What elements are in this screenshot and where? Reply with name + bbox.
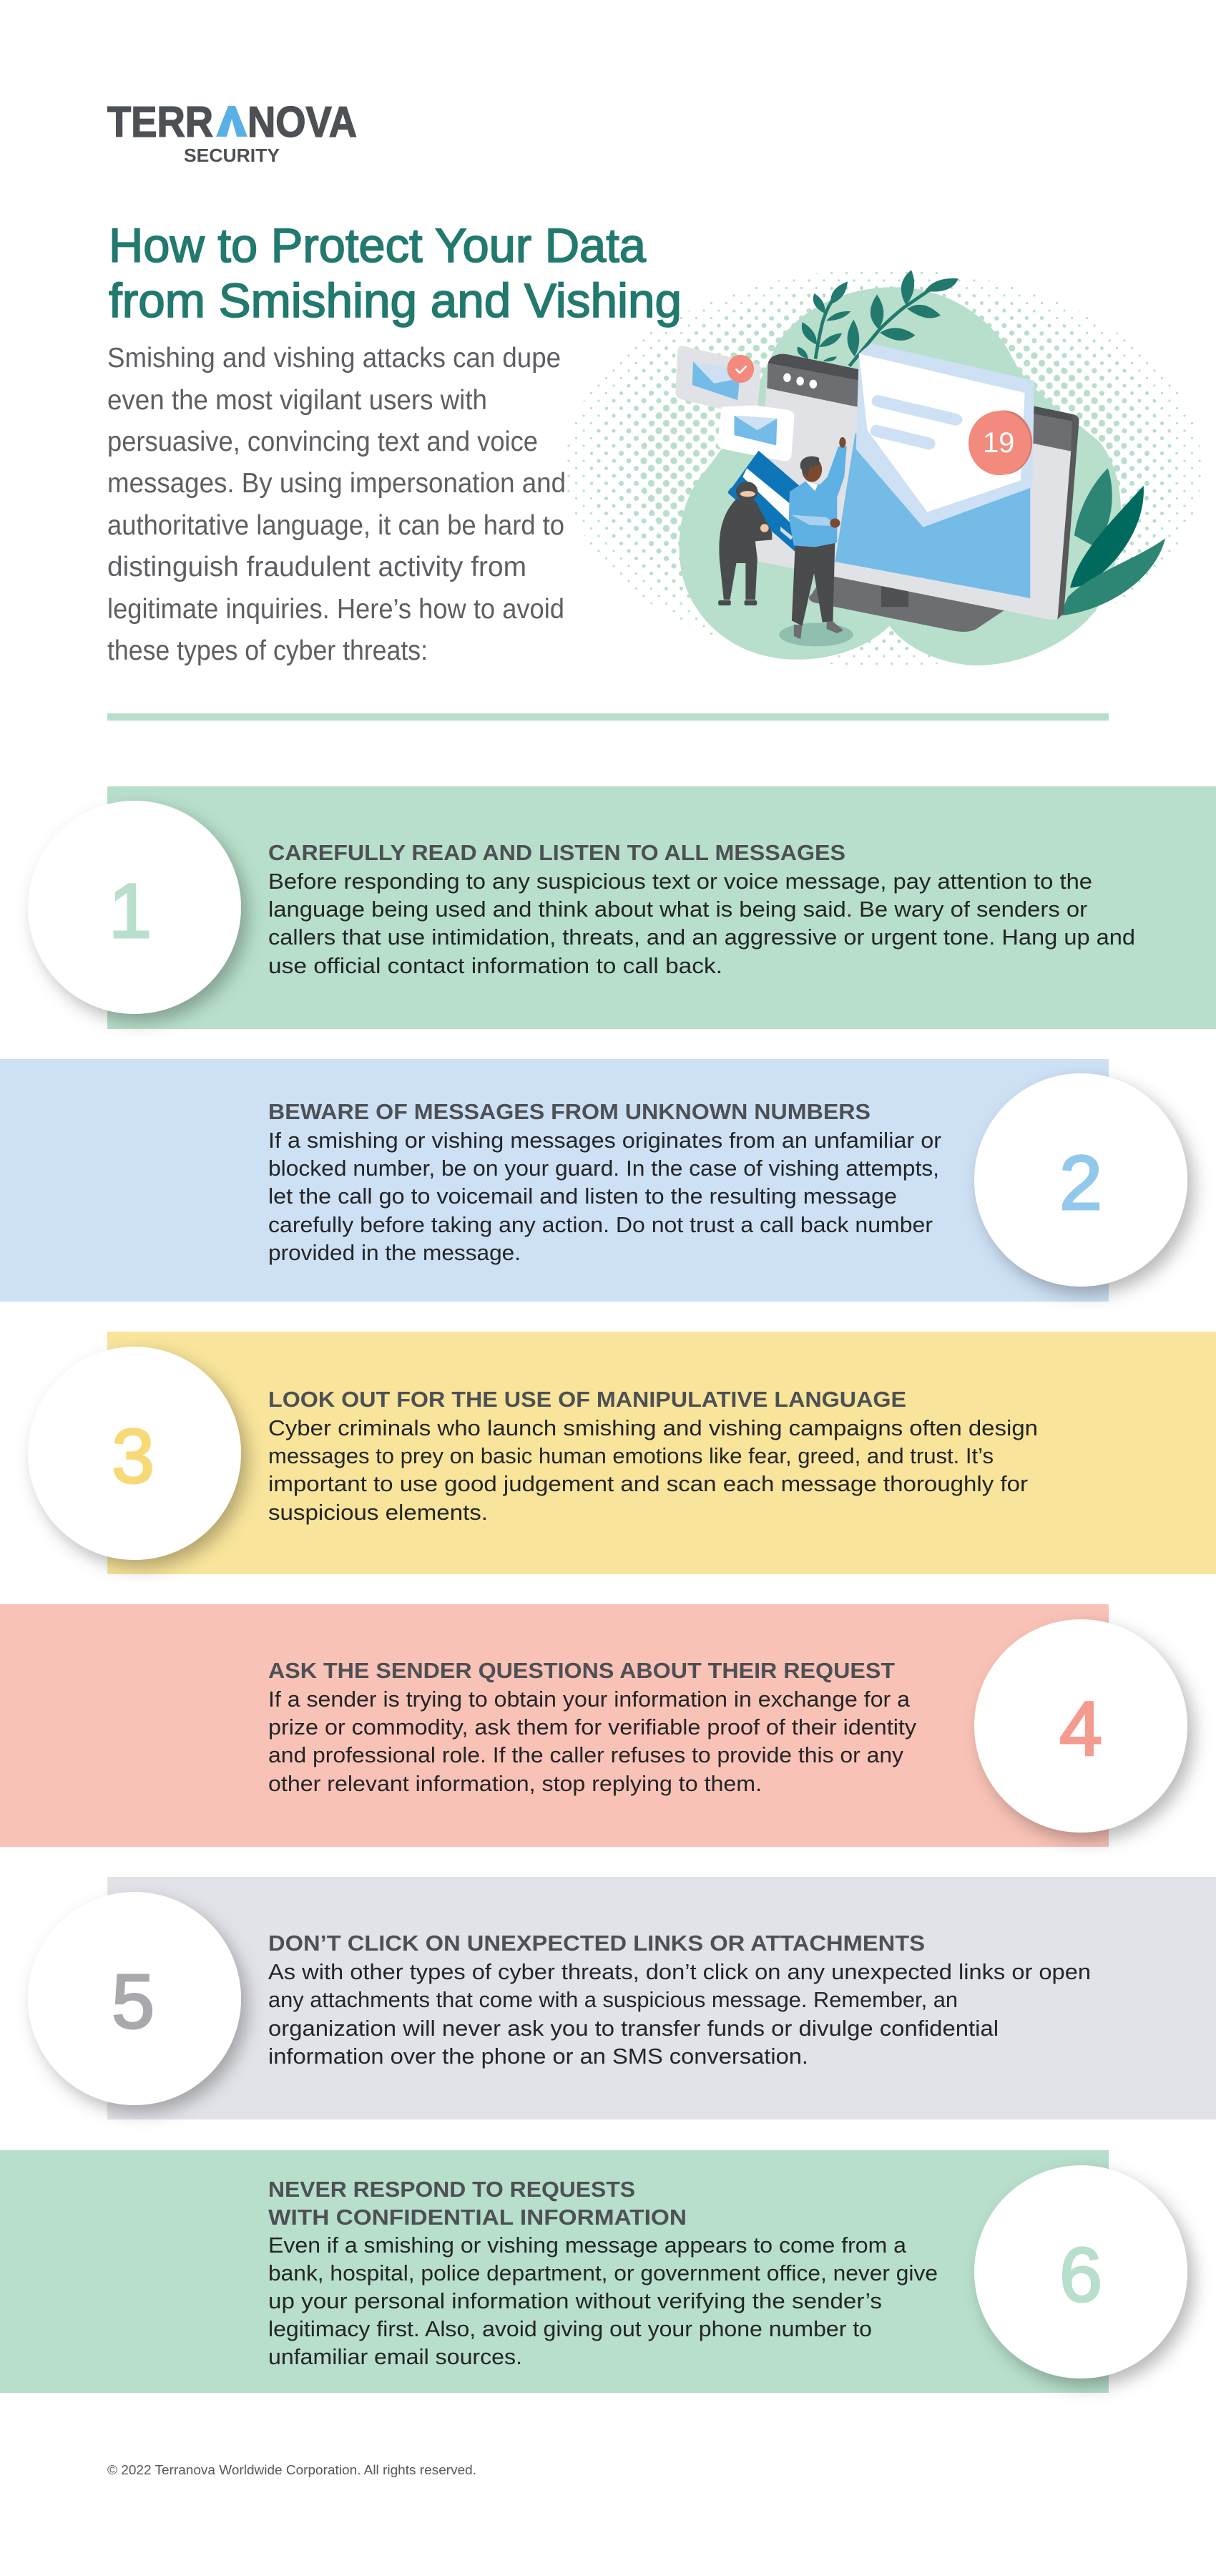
step 1 text (268, 840, 1135, 978)
step 2 text: carefully before taking any action. Do not trust a call back number (268, 1212, 933, 1237)
number circle 4 (974, 1619, 1187, 1833)
step 2 text: BEWARE OF MESSAGES FROM UNKNOWN NUMBERS (268, 1099, 871, 1124)
title (109, 219, 682, 328)
logo: Terranova Security (107, 98, 357, 166)
step 5 text: any attachments that come with a suspicious message. Remember, an (268, 1987, 958, 2012)
number circle 3 (28, 1347, 241, 1560)
step 1 text: language being used and think about what is being said. Be wary of senders or (268, 897, 1087, 922)
step 3 text: messages to prey on basic human emotions like fear, greed, and trust. It’s (268, 1443, 994, 1468)
step 4 text: prize or commodity, ask them for verifiable proof of their identity (268, 1714, 917, 1740)
step 6 text: Even if a smishing or vishing message appears to come from a (268, 2233, 907, 2258)
step 6 text: NEVER RESPOND TO REQUESTS (268, 2177, 635, 2202)
logo: Terranova Security: SECURITY (184, 145, 280, 166)
title: from Smishing and Vishing (109, 274, 682, 328)
plants: top branches (797, 270, 958, 366)
step 3 text: LOOK OUT FOR THE USE OF MANIPULATIVE LANGUAGE (268, 1387, 906, 1412)
panel: step 3 (28, 1332, 1216, 1574)
step 6 text: WITH CONFIDENTIAL INFORMATION (268, 2205, 687, 2230)
green blob (680, 287, 1121, 665)
step 3 text (268, 1387, 1038, 1525)
number circle 2 (974, 1073, 1187, 1287)
step 2 text: let the call go to voicemail and listen to the resulting message (268, 1184, 897, 1209)
intro paragraph: messages. By using impersonation and (107, 468, 566, 499)
number circle 5 (28, 1892, 241, 2105)
intro paragraph: even the most vigilant users with (107, 385, 487, 416)
step 1 text: callers that use intimidation, threats, and an aggressive or urgent tone. Hang up and (268, 924, 1135, 950)
step 5 text: DON’T CLICK ON UNEXPECTED LINKS OR ATTACHMENTS (268, 1931, 925, 1956)
step 2 text: provided in the message. (268, 1240, 521, 1265)
step 4 text: other relevant information, stop replying to them. (268, 1771, 762, 1796)
step 3 text: important to use good judgement and scan each message thoroughly for (268, 1471, 1028, 1496)
step 5 text: information over the phone or an SMS conversation. (268, 2044, 808, 2069)
step 1 text: CAREFULLY READ AND LISTEN TO ALL MESSAGES (268, 840, 845, 865)
intro paragraph: Smishing and vishing attacks can dupe (107, 343, 561, 374)
step 1 text: use official contact information to call back. (268, 953, 722, 978)
monitor body (755, 354, 1079, 620)
intro paragraph: persuasive, convincing text and voice (107, 426, 538, 457)
intro paragraph (107, 343, 566, 666)
step 4 text (268, 1658, 917, 1796)
monitor stand (809, 570, 1007, 632)
step 4 text: If a sender is trying to obtain your information in exchange for a (268, 1687, 911, 1712)
step 3 text: Cyber criminals who launch smishing and vishing campaigns often design (268, 1415, 1038, 1440)
number circle 1: 1 (109, 867, 152, 954)
intro paragraph: legitimate inquiries. Here’s how to avoid (107, 594, 564, 625)
figure: man with raised arm (779, 437, 853, 646)
step 6 text: up your personal information without verifying the sender’s (268, 2288, 882, 2313)
plants: lower right leaves (1074, 468, 1112, 547)
title: How to Protect Your Data (109, 219, 647, 273)
icon: blue logo triangle (216, 106, 247, 137)
screen: blue envelope (835, 433, 1030, 598)
step 1 text: Before responding to any suspicious text or voice message, pay attention to the (268, 869, 1092, 894)
number circle 4: 4 (1059, 1685, 1102, 1772)
illustration: halftone backdrop, monitor, figures and plants (565, 269, 1202, 667)
step 6 text: bank, hospital, police department, or government office, never give (268, 2260, 938, 2285)
step 4 text: and professional role. If the caller refuses to provide this or any (268, 1742, 904, 1767)
small card with envelope and check (675, 346, 761, 416)
step 2 text (268, 1099, 941, 1265)
figure: hooded thief (718, 482, 772, 605)
panel: step 6 (0, 2150, 1187, 2393)
white card with envelope (717, 406, 795, 461)
number circle 5: 5 (112, 1958, 155, 2044)
envelope flap and letter (856, 343, 1034, 527)
notification badge 19: 19 (983, 427, 1014, 459)
footer copyright: © 2022 Terranova Worldwide Corporation. All rights reserved. (107, 2463, 476, 2477)
logo: Terranova Security: TERR (107, 98, 213, 146)
panel: step 5 (28, 1877, 1216, 2119)
step 5 text: organization will never ask you to transfer funds or divulge confidential (268, 2016, 999, 2041)
number circle 3: 3 (112, 1413, 155, 1499)
step 4 text: ASK THE SENDER QUESTIONS ABOUT THEIR REQUEST (268, 1658, 895, 1683)
step 3 text: suspicious elements. (268, 1500, 488, 1525)
intro paragraph: these types of cyber threats: (107, 635, 428, 666)
logo: Terranova Security: NOVA (247, 98, 357, 146)
step 5 text: As with other types of cyber threats, don’t click on any unexpected links or open (268, 1959, 1091, 1984)
panel: step 4 (0, 1604, 1187, 1847)
number circle 6 (974, 2165, 1187, 2379)
step 6 text: legitimacy first. Also, avoid giving out your phone number to (268, 2316, 872, 2341)
step 2 text: blocked number, be on your guard. In the case of vishing attempts, (268, 1156, 939, 1181)
credit card (728, 451, 799, 554)
panel: step 2 (0, 1059, 1187, 1302)
step 6 text (268, 2177, 938, 2369)
step 6 text: unfamiliar email sources. (268, 2344, 522, 2369)
number circle 2: 2 (1059, 1139, 1102, 1226)
step 5 text (268, 1931, 1091, 2069)
step 2 text: If a smishing or vishing messages originates from an unfamiliar or (268, 1128, 941, 1153)
intro paragraph: authoritative language, it can be hard to (107, 510, 564, 541)
number circle 1 (28, 801, 241, 1014)
notification badge 19 (969, 410, 1032, 475)
panel: step 1 (28, 786, 1216, 1029)
intro paragraph: distinguish fraudulent activity from (107, 552, 526, 582)
number circle 6: 6 (1059, 2231, 1102, 2318)
